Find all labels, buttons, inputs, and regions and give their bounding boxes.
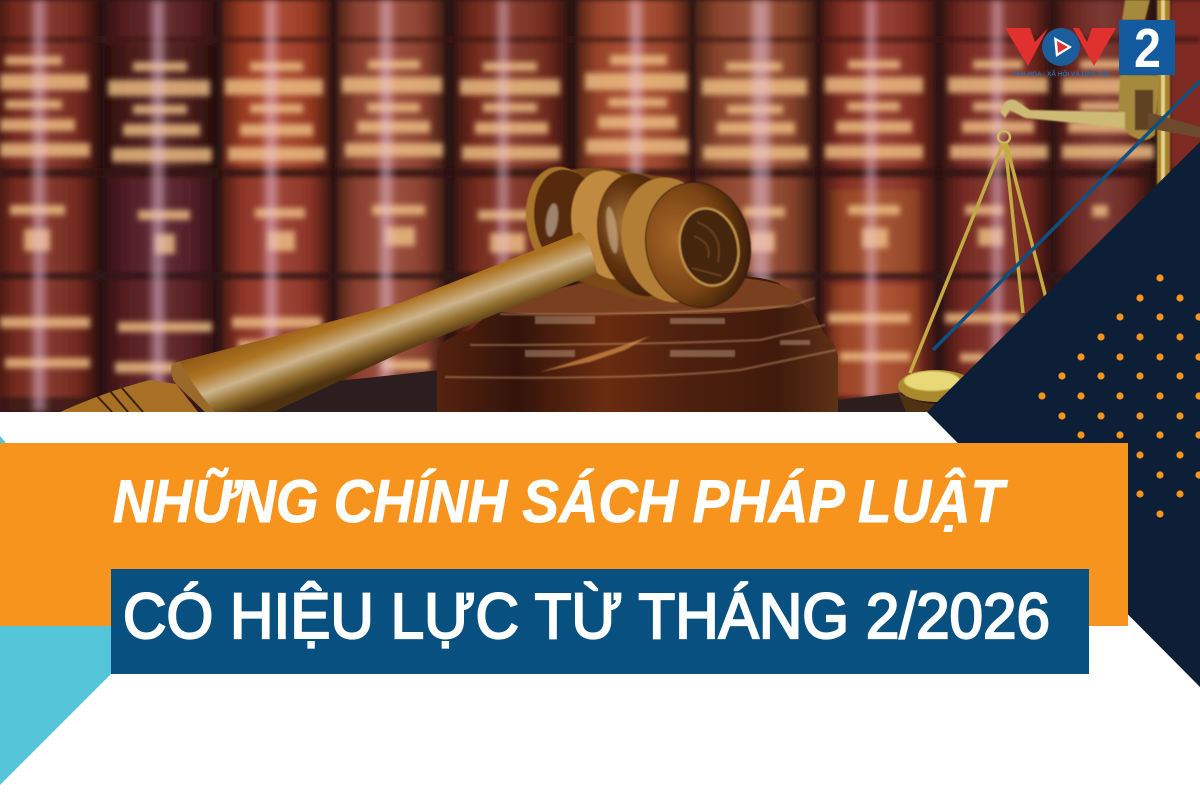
scales [898, 0, 1200, 412]
photo: law books, gavel and scales [0, 0, 1200, 412]
orange dot pattern [1038, 274, 1200, 518]
table surface [190, 370, 905, 412]
logo: tagline: VĂN HÓA - XÃ HỘI VÀ DÂN TỘC [1012, 69, 1111, 78]
white lower background [0, 412, 1200, 797]
logo: channel 2 box: 2 [1134, 17, 1161, 79]
teal triangle accent top [0, 436, 6, 443]
orange title band [0, 443, 1128, 626]
navy triangle panel [927, 142, 1200, 687]
sounding block [437, 274, 838, 412]
diagonal blue line [933, 81, 1200, 350]
gavel head [516, 159, 762, 317]
teal lower left shape [0, 626, 111, 785]
title line two: CÓ HIỆU LỰC TỪ THÁNG 2/2026 [123, 580, 1050, 652]
logo: channel 2 box [1119, 17, 1175, 79]
law book spines [0, 0, 1200, 412]
logo: blue circle with play mark [1042, 28, 1080, 66]
blurred gold spine lettering [0, 55, 1154, 373]
VOV2 logo [1005, 17, 1175, 79]
gavel handle [60, 232, 597, 412]
logo: red V letters [1005, 28, 1116, 66]
spine highlights [33, 0, 1002, 412]
blue title band [111, 569, 1089, 674]
title line one: NHỮNG CHÍNH SÁCH PHÁP LUẬT [113, 468, 1008, 535]
